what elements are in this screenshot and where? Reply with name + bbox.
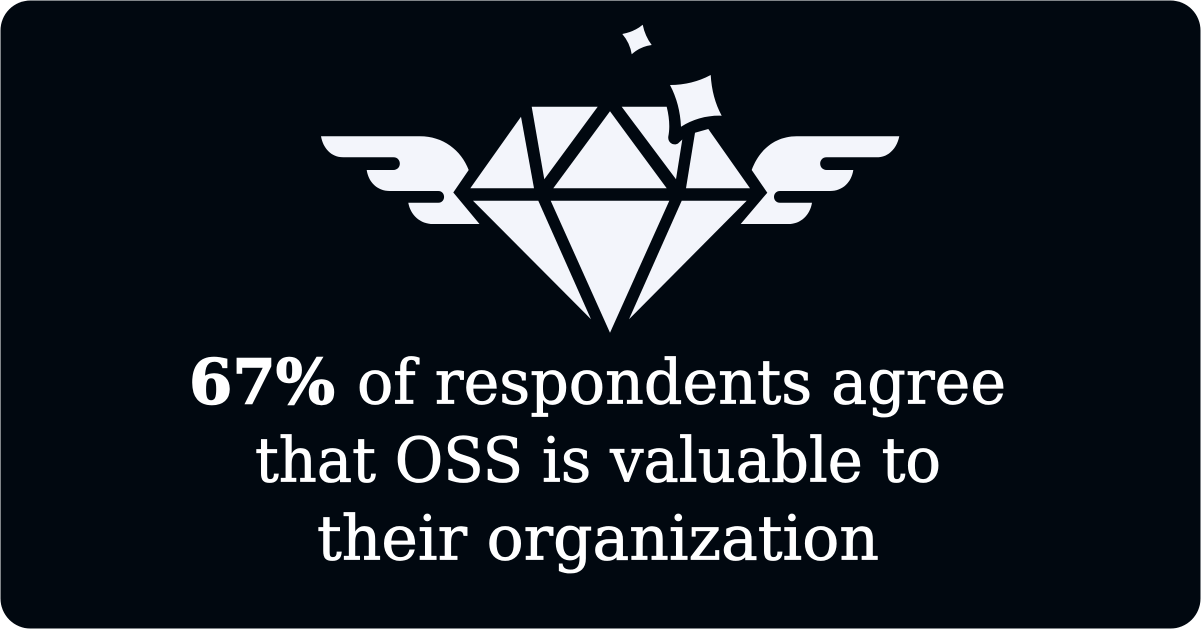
stat: 67%: 67% bbox=[189, 346, 335, 418]
icon: winged diamond with sparkles bbox=[321, 25, 899, 333]
icon: small sparkle bbox=[622, 25, 652, 54]
icon: right wing bbox=[741, 136, 899, 224]
text line 1: of respondents agree bbox=[357, 346, 1006, 418]
icon: large sparkle bbox=[670, 75, 722, 127]
text line 3: their organization bbox=[317, 502, 879, 574]
headline text bbox=[189, 346, 1006, 574]
icon: diamond facets bbox=[470, 107, 750, 333]
icon: left wing bbox=[321, 136, 480, 224]
text line 2: that OSS is valuable to bbox=[255, 424, 941, 496]
